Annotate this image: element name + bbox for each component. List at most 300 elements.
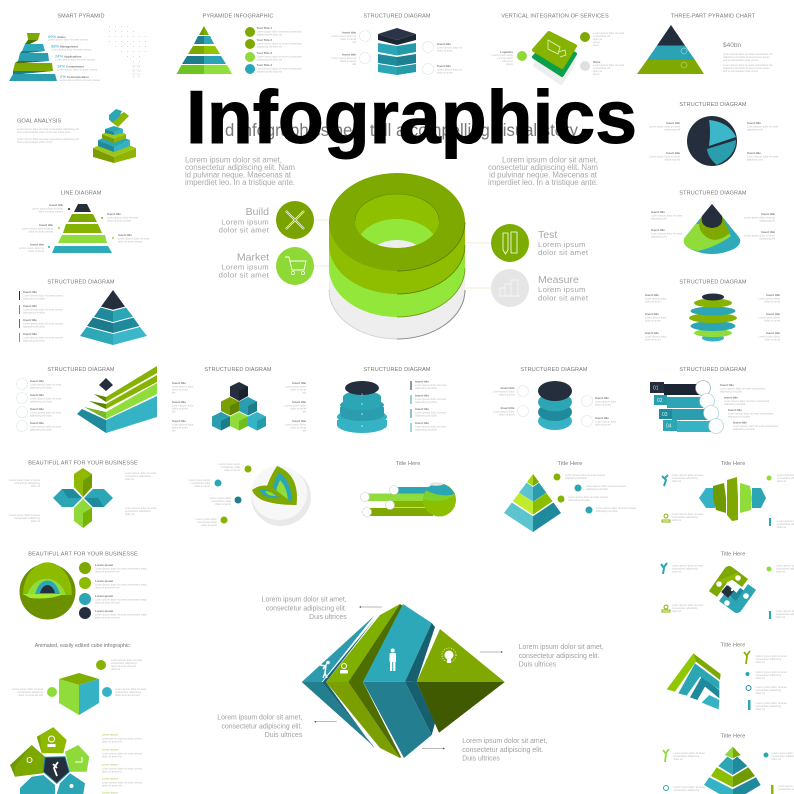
chart: disc stack (538, 381, 572, 430)
legend: Lorem ipsum dolor sit amet consectetur adipi (95, 598, 147, 602)
legend text: Lorem ipsum dolor sit amet consec (55, 58, 96, 62)
labels: Lorem ipsum dolor sit amet (593, 63, 625, 67)
labels: Lorem ipsum dolor sit amet (9, 513, 40, 517)
labels: Lorem ipsum dolor (595, 400, 617, 404)
labels: consectetur adipiscing (125, 509, 151, 513)
labels: dolor sit (777, 479, 786, 483)
chart: bars into sphere (360, 482, 456, 516)
text block (723, 42, 773, 73)
legend: dolor sit amet elit sed (95, 600, 120, 604)
labels: Insert title (501, 406, 515, 410)
labels: Insert title (666, 121, 680, 125)
labels: Lorem ipsum dolor sit amet (747, 124, 779, 128)
labels: dolor sit (756, 691, 765, 695)
legend: Lorem ipsum dolor sit amet consectetur (256, 54, 302, 58)
callout: build: Lorem ipsum (221, 218, 269, 226)
chart: stacked pyramid (52, 204, 112, 253)
legend: Lorem ipsum dolor sit amet consec (23, 294, 64, 298)
heading: STRUCTURED DIAGRAM (47, 367, 115, 373)
chart: tab bars (650, 380, 724, 434)
labels: adipiscing elit (664, 128, 680, 132)
labels: Insert title (747, 121, 761, 125)
labels: Lorem ipsum dolor (285, 384, 306, 388)
labels: Lorem ipsum dolor sit amet (744, 216, 775, 220)
panel: sphere cross section (189, 462, 311, 527)
chart: box stack (378, 28, 416, 75)
legend: Lorem ipsum dolor sit amet consectetur adipi (95, 582, 147, 586)
labels: Insert title (645, 293, 659, 297)
legend: Insert title (415, 380, 429, 384)
text block: sed ut perspiciatis unde omnis (723, 69, 759, 73)
labels (19, 203, 150, 253)
chart: stepped cylinder (337, 381, 387, 433)
labels: Lorem ipsum dolor sit amet (756, 701, 787, 705)
labels: Lorem ipsum dolor (759, 296, 780, 300)
labels (651, 210, 775, 240)
labels: dolor sit amet (172, 426, 188, 430)
labels: elit (172, 410, 176, 414)
text block: sed ut perspiciatis unde omnis (723, 58, 759, 62)
labels: adipiscing elit dolor (733, 427, 755, 431)
labels: dolor sit (777, 525, 786, 529)
labels: Lorem ipsum dolor sit amet consec (565, 473, 606, 477)
legend: adipiscing elit dolor (23, 296, 45, 300)
callout: test: Test (538, 229, 557, 241)
callout: build (219, 201, 314, 239)
heading: STRUCTURED DIAGRAM (363, 14, 431, 20)
labels: consectetur elit (593, 34, 611, 38)
labels: adipiscing elit (759, 218, 775, 222)
legend: Lorem ipsum dolor sit amet consec (23, 308, 64, 312)
labels: Lorem ipsum dolor sit amet (118, 236, 150, 240)
labels: Lorem ipsum dolor sit amet (672, 564, 704, 568)
labels: Insert title (292, 381, 306, 385)
labels: dolor sit amet (499, 412, 515, 416)
labels: Lorem ipsum dolor sit amet (747, 154, 779, 158)
labels: Lorem ipsum dolor sit amet (593, 31, 625, 35)
labels: dolor sit amet (290, 426, 306, 430)
labels (189, 462, 252, 527)
callout: market: Lorem ipsum (221, 262, 269, 272)
panel: smart pyramid (9, 14, 150, 82)
legend: adipiscing elit dolor (30, 400, 52, 404)
chart: stepped pyramid (93, 109, 136, 163)
panel: flower diagram (9, 460, 157, 528)
icon: figure with gear (320, 661, 330, 678)
legend (79, 562, 147, 620)
labels: Insert title (645, 312, 659, 316)
legend: adipiscing elit dolor (23, 324, 45, 328)
labels: Lorem ipsum dolor (172, 384, 194, 388)
legend text: 99% Aliens (48, 34, 66, 39)
labels: dolor sit (756, 660, 765, 664)
panel: title here ring square (661, 552, 794, 619)
labels: ipsum (593, 40, 600, 44)
labels: Insert title (49, 203, 63, 207)
labels: adipiscing elit dolor (586, 487, 608, 491)
labels: adipiscing elit dolor (728, 414, 750, 418)
text block: intro left: imperdiet leo. In a tristique ante. (185, 178, 295, 187)
labels: dolor sit (776, 570, 785, 574)
legend: Lorem ipsum dolor sit amet (30, 396, 62, 400)
callout: measure: Measure (538, 274, 579, 286)
heading: STRUCTURED DIAGRAM (47, 280, 115, 286)
panel: structured layered discs (645, 280, 780, 342)
chart: spiral pyramid (9, 33, 57, 81)
labels: Lorem ipsum dolor (493, 390, 515, 394)
labels: consectetur adipi (190, 481, 210, 485)
labels: adipiscing elit dolor (568, 498, 590, 502)
heading: GOAL ANALYSIS (17, 118, 61, 124)
labels: Lorem ipsum dolor sit (437, 46, 462, 50)
labels: dolor sit amet consec (28, 230, 54, 234)
labels: elit (353, 62, 356, 66)
legend: Lorem ipsum dolor sit amet (415, 397, 447, 401)
labels: dolor sit amet (172, 388, 188, 392)
chart: disc sphere (689, 294, 737, 342)
legend: Insert title (30, 407, 44, 411)
labels: Insert title (172, 400, 186, 404)
labels: elit (303, 410, 306, 414)
text block: adipiscing elit dolor sit amet lorem ipsum (723, 55, 770, 59)
legend: adipiscing elit dolor sit (256, 32, 282, 36)
legend: adipiscing elit dolor sit (256, 70, 282, 74)
legend: adipiscing elit dolor (415, 386, 437, 390)
callout: top right: Lorem ipsum dolor sit amet, (519, 644, 604, 651)
labels: Insert title (292, 419, 306, 423)
labels: dolor sit amet (764, 318, 780, 322)
labels: Lorem ipsum dolor sit amet (111, 658, 143, 662)
legend text: Lorem ipsum dolor sit amet consec (57, 68, 98, 72)
labels: Lorem ipsum dolor sit amet (672, 473, 704, 477)
chart: stepped cylinder: 3 (361, 412, 363, 416)
labels: dolor sit (672, 609, 681, 613)
labels: Insert title (107, 212, 121, 216)
legend: adipiscing elit dolor (23, 338, 45, 342)
legend: dolor sit amet elit (102, 770, 122, 774)
chart: stepped cylinder: 3 (361, 424, 363, 428)
chart: tab bars: 02 (657, 398, 663, 404)
labels: Lorem ipsum dolor (759, 316, 780, 320)
labels: adipiscing elit dolor (720, 390, 742, 394)
labels: dolor sit (776, 615, 785, 619)
chart: hex bars (699, 477, 766, 521)
callout: market (219, 247, 314, 285)
callout: test: dolor sit amet (538, 248, 589, 257)
labels: Insert title (761, 212, 775, 216)
callout: build: Build (246, 206, 269, 218)
text block: intro left (185, 156, 295, 187)
legend: Insert title (30, 393, 44, 397)
labels: adipiscing elit dolor (724, 402, 746, 406)
callout: bottom right: Duis ultrices (462, 756, 500, 762)
labels: Insert title (595, 396, 609, 400)
labels: consectetur adipi (220, 465, 240, 469)
heading: Title Here (721, 552, 745, 558)
labels: Lorem ipsum dolor (645, 334, 667, 338)
labels: Lorem ipsum dolor (595, 420, 617, 424)
legend text: Lorem ipsum dolor sit amet consec (51, 48, 92, 52)
labels: Lorem ipsum dolor sit amet (651, 232, 683, 236)
labels: dolor sit amet (499, 392, 515, 396)
legend: dolor sit amet elit sed (95, 570, 120, 574)
labels: Lorem ipsum dolor sit amet (9, 478, 40, 482)
labels: Lorem ipsum dolor sit amet (651, 214, 683, 218)
labels: dolor sit amet (340, 37, 356, 41)
chart: flower (53, 468, 113, 528)
labels: Lorem ipsum dolor (196, 517, 217, 521)
labels: Lorem ipsum dolor (645, 316, 667, 320)
heading: PYRAMIDE INFOGRAPHIC (203, 14, 273, 20)
legend: Lorem ipsum dolor sit amet consec (102, 736, 143, 740)
labels: dolor sit amet (437, 70, 453, 74)
labels: consectetur adipiscing (14, 516, 41, 520)
text block: Lorem ipsum dolor sit amet consectetur elit (723, 52, 773, 56)
labels: adipiscing elit (747, 158, 763, 162)
legend: Lorem ipsum dolor sit amet consectetur (256, 30, 302, 34)
chart: rounded tiles (534, 33, 575, 83)
labels: Insert title (172, 381, 186, 385)
labels: consectetur adipiscing (756, 673, 782, 677)
labels: Insert title (651, 210, 665, 214)
panel: goal analysis (17, 109, 136, 163)
labels (720, 383, 779, 431)
labels: Lorem ipsum dolor sit amet (107, 216, 139, 220)
callout: test: Lorem ipsum (538, 240, 586, 249)
legend: Insert title (30, 379, 44, 383)
labels: Lorem ipsum dolor sit (331, 34, 356, 38)
legend: Your Title 3 (256, 51, 272, 55)
labels: consectetur adipiscing (756, 688, 782, 692)
heading: STRUCTURED DIAGRAM (679, 280, 747, 286)
legend: adipiscing elit dolor (415, 428, 437, 432)
callout: top right: Duis ultrices (519, 662, 557, 668)
legend (410, 380, 447, 432)
labels: Insert title (666, 151, 680, 155)
labels: adipiscing elit (651, 234, 667, 238)
text block: intro right: imperdiet leo. In a tristique ante. (488, 178, 598, 187)
stacked ring chart (314, 173, 491, 339)
labels: dolor sit amet consec (107, 218, 132, 222)
labels: dolor sit amet elit sed (18, 693, 44, 697)
legend (245, 26, 302, 74)
callout: measure (491, 269, 589, 307)
labels: consectetur adipiscing (125, 474, 151, 478)
legend: Insert title (30, 421, 44, 425)
icon: person (340, 664, 348, 674)
text block: $40bn (723, 42, 741, 49)
labels: consectetur adipiscing (14, 481, 41, 485)
chart: sphere (687, 116, 737, 166)
labels: Insert title (724, 396, 738, 400)
olive triangle (417, 629, 505, 733)
legend: Insert title (23, 332, 37, 336)
labels: Lorem ipsum dolor sit amet consectetur (720, 386, 766, 390)
chart: pyramid (704, 747, 761, 794)
labels: Insert title (172, 419, 186, 423)
labels: Insert title (766, 331, 780, 335)
labels: Lorem ipsum dolor sit (19, 246, 44, 250)
chart: chevron stairs (77, 366, 157, 433)
labels: Insert title (118, 233, 132, 237)
labels: Lorem ipsum dolor sit amet (32, 206, 63, 210)
labels: Lorem ipsum dolor (172, 422, 194, 426)
chart: pyramid (504, 474, 561, 532)
legend: adipiscing elit dolor (23, 310, 45, 314)
labels: consectetur adipiscing (111, 661, 137, 665)
labels: dolor sit amet (645, 338, 661, 342)
labels: elit (303, 390, 306, 394)
legend: Your Title 2 (256, 38, 272, 42)
dotted map (105, 25, 150, 80)
heading: Animated, easily edited cube infographic: (35, 643, 131, 649)
labels (331, 30, 462, 74)
chart: cubes (212, 382, 266, 430)
labels: consectetur adipiscing (672, 566, 698, 570)
labels: consectetur adipiscing (672, 476, 698, 480)
chart: stepped cylinder: 2 (361, 402, 363, 406)
legend: dolor sit amet elit sed (95, 586, 120, 590)
labels: ipsum (506, 62, 513, 66)
legend: Insert title (415, 407, 429, 411)
callout: top left: Duis ultrices (309, 614, 347, 621)
legend: Lorem ipsum dolor sit amet consec (102, 752, 143, 756)
labels: Insert title (437, 42, 451, 46)
heading: BEAUTIFUL ART FOR YOUR BUSINESSE (28, 552, 138, 558)
main diagram: chevron diamond (217, 596, 604, 762)
labels: dolor sit amet (224, 468, 240, 472)
heading: Title Here (721, 642, 745, 648)
legend: Lorem ipsum dolor sit amet (30, 410, 62, 414)
legend: Lorem ipsum (95, 563, 114, 567)
labels: dolor sit amet elit sed (111, 664, 136, 668)
labels: Lorem ipsum dolor (172, 404, 194, 408)
heading: THREE-PART PYRAMID CHART (671, 14, 756, 20)
labels: Lorem ipsum dolor sit amet consec (586, 484, 627, 488)
labels: consectetur adipiscing (756, 657, 782, 661)
panel: cube infographic (12, 643, 147, 715)
legend: Lorem ipsum dolor sit amet (30, 424, 62, 428)
labels: Lorem ipsum dolor sit amet (649, 154, 680, 158)
callout: measure: Lorem ipsum (538, 285, 586, 294)
labels: Lorem ipsum dolor sit amet consec (596, 506, 637, 510)
labels: Insert title (342, 52, 356, 56)
heading: VERTICAL INTEGRATION OF SERVICES (501, 14, 609, 20)
legend: Lorem ipsum (102, 762, 119, 766)
legend: Your Title 4 (256, 63, 272, 67)
legend (19, 290, 64, 342)
olive chevron (326, 604, 403, 758)
labels: dolor sit (593, 37, 602, 41)
heading: SMART PYRAMID (57, 14, 105, 20)
text block: Lorem ipsum dolor sit amet consectetur adipiscing elit (17, 127, 79, 131)
labels: Insert title (720, 383, 734, 387)
labels: dolor sit amet (340, 59, 356, 63)
labels: Lorem ipsum dolor (285, 422, 306, 426)
legend text: Lorem ipsum dolor sit amet consec (60, 78, 101, 82)
text block: Sed ut perspiciatis unde omnis iste natus error (17, 130, 70, 134)
text block: intro right: Lorem ipsum dolor sit amet, (502, 156, 598, 164)
left teal chevron (302, 616, 375, 748)
labels: dolor sit (674, 757, 683, 761)
legend: adipiscing elit dolor sit (256, 58, 282, 62)
text block: intro left: Lorem ipsum dolor sit amet, (185, 156, 282, 164)
panel: structured cubes (172, 367, 306, 432)
legend: dolor sit amet elit (102, 754, 122, 758)
labels: Lorem ipsum dolor sit amet consectetur (728, 412, 774, 416)
text block: intro right: id pulvinar neque. Maecenas at (489, 170, 598, 180)
legend: Insert title (23, 318, 37, 322)
legend: Lorem ipsum dolor sit amet (415, 424, 447, 428)
legend: Lorem ipsum dolor sit amet consec (102, 780, 143, 784)
legend: Insert title (23, 290, 37, 294)
labels: consectetur adipiscing (17, 690, 44, 694)
labels: Lorem ipsum dolor sit amet (672, 512, 704, 516)
text block (17, 127, 79, 144)
legend: Insert title (415, 394, 429, 398)
panel: title here chevron pyramid (667, 642, 787, 711)
legend: Lorem ipsum dolor sit amet consectetur adipi (95, 566, 147, 570)
chart: tab bars: 04 (666, 424, 672, 430)
chart: cube (59, 673, 99, 715)
labels (645, 293, 780, 342)
labels: Insert title (728, 408, 742, 412)
panel: structured chevron stairs (16, 366, 157, 433)
labels: dolor sit amet (764, 338, 780, 342)
text block: intro left: id pulvinar neque. Maecenas at (185, 170, 292, 180)
labels (172, 381, 306, 432)
labels: dolor sit (672, 518, 681, 522)
legend: dolor sit amet elit (102, 784, 122, 788)
labels: dolor sit amet (595, 402, 611, 406)
panel: title here 3d pyramid (504, 461, 637, 532)
legend: Lorem ipsum dolor sit amet consec (23, 322, 64, 326)
heading: LINE DIAGRAM (61, 190, 102, 196)
panel: structured diagram box stack (331, 14, 462, 75)
callout: bottom left: Duis ultrices (265, 732, 303, 739)
labels: adipiscing elit (759, 236, 775, 240)
labels: Lorem ipsum dolor sit amet (125, 471, 157, 475)
labels: Lorem ipsum dolor sit amet (744, 234, 775, 238)
panel: pentagon cluster (10, 727, 143, 794)
legend: Lorem ipsum (95, 609, 114, 613)
callout: top left (262, 596, 382, 621)
labels: dolor sit (672, 479, 681, 483)
legend: Lorem ipsum (95, 594, 114, 598)
labels: dolor sit amet elit sed (115, 693, 140, 697)
panel: vertical integration (492, 14, 625, 83)
legend: Your Title 1 (256, 26, 272, 30)
text block: intro right: consectetur adipiscing elit. Nam (488, 163, 598, 172)
main title: Infographics (186, 75, 637, 159)
panel: title here bars (662, 461, 794, 529)
legend: adipiscing elit dolor (30, 414, 52, 418)
labels: Lorem ipsum dolor (493, 410, 515, 414)
labels: Lorem ipsum dolor (759, 334, 780, 338)
labels: Insert title (30, 242, 44, 246)
heading: STRUCTURED DIAGRAM (204, 367, 272, 373)
labels (744, 651, 787, 711)
chart: pentagons (10, 727, 89, 794)
labels: consectetur adipi (197, 520, 217, 524)
labels: dolor sit amet consec (38, 210, 64, 214)
labels: dolor sit amet (215, 502, 231, 506)
labels: adipiscing elit (664, 158, 680, 162)
legend: Lorem ipsum dolor sit amet consec (102, 766, 143, 770)
chart: nested chevrons (667, 653, 721, 709)
labels (12, 658, 147, 697)
labels: Insert title (766, 293, 780, 297)
